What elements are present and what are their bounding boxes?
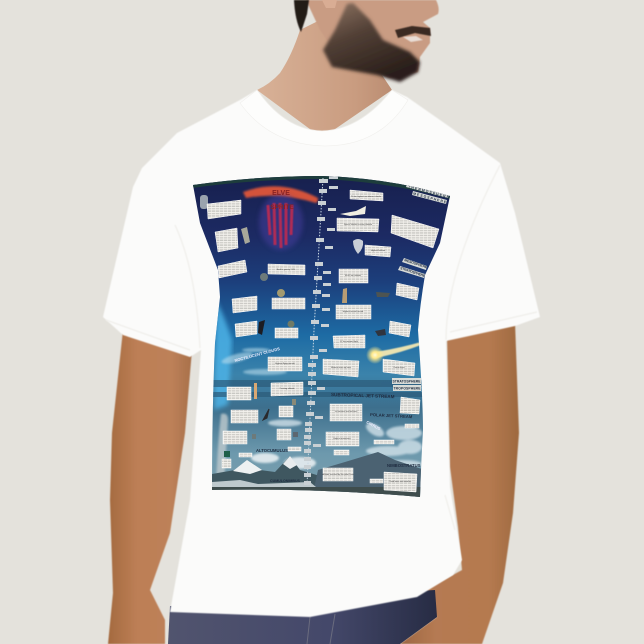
mountains: [212, 452, 422, 497]
right arm and hand: [400, 322, 519, 644]
box captions: [275, 195, 412, 483]
collar band: [240, 90, 408, 146]
box captions: Highest aircraft record: [343, 310, 364, 313]
mid clouds: [250, 452, 318, 470]
layer labels: POLAR JET STREAM: [370, 412, 413, 419]
box captions: Cloud base and weather: [389, 480, 412, 483]
elve and sprite labels: ELVE: [272, 190, 290, 197]
box captions: Meteors burn up here: [331, 366, 352, 369]
box captions: Highest balloon: [371, 249, 386, 252]
balloon: [353, 239, 363, 254]
box captions: Earth's gravity 1.6%: [277, 268, 295, 271]
box captions: Highest flying aircraft: [275, 362, 295, 365]
altitude ruler: [304, 176, 338, 486]
elve and sprite labels: [270, 190, 294, 209]
layer labels: [234, 185, 450, 483]
box captions: 27 km meteor flight: [340, 340, 358, 343]
noctilucent cloud wisps: [221, 348, 287, 375]
elve red arc: [243, 186, 318, 203]
beard: [323, 3, 431, 82]
layer labels: NOCTILUCENT CLOUDS: [234, 346, 281, 363]
layer labels: THERMOSPHERE: [408, 185, 450, 200]
box captions: Jet streams and airliners: [335, 410, 357, 413]
satellite and aircraft icons: [200, 195, 390, 457]
dark green top edge: [190, 174, 452, 199]
elve and sprite labels: SPRITE: [270, 204, 294, 211]
light blue aurora beam: [214, 300, 232, 410]
box captions: Ozone layer: [393, 366, 405, 369]
box captions: Altitude reached by the polar front: [322, 473, 354, 476]
left cloud column: [216, 414, 228, 484]
layer labels: SUBTROPICAL JET STREAM: [331, 392, 395, 399]
layer label plates: [392, 184, 449, 391]
layer labels: CUMULONIMBUS: [270, 479, 301, 483]
poster: atmosphere layers: [185, 170, 460, 500]
layer labels: CIRRUS: [366, 419, 382, 431]
ear: [322, 0, 337, 8]
layer labels: MESOSPHERE: [413, 192, 447, 204]
sleeve and side folds: [106, 165, 537, 530]
box captions: 48-40 km altitude: [345, 274, 362, 277]
left arm: [108, 330, 192, 644]
layer labels: STRATOSPHERE: [392, 380, 421, 384]
layer labels: NIMBOSTRATUS: [387, 463, 421, 468]
sky gradient: [185, 170, 460, 500]
face: [306, 0, 439, 78]
meteor: [366, 342, 421, 364]
tropopause bands: [210, 380, 425, 397]
info boxes: [207, 190, 439, 492]
layer labels: MESOSPHERE: [404, 258, 428, 270]
sprite: [259, 194, 303, 250]
neck: [257, 10, 420, 138]
hair: [294, 0, 309, 32]
jeans: [168, 590, 437, 644]
layer labels: STRATOSPHERE: [400, 266, 426, 278]
box captions: Highest mountains: [333, 437, 351, 440]
box captions: 90 km highest noctilucent clouds: [351, 195, 381, 198]
layer labels: TROPOSPHERE: [394, 386, 421, 390]
layer labels: ALTOCUMULUS: [256, 448, 288, 453]
box captions: Space Shuttle re-entry altitude: [344, 223, 373, 226]
space shuttle: [340, 206, 366, 216]
t-shirt: [103, 90, 540, 617]
box captions: Cruising altitude: [280, 387, 295, 390]
high clouds: [268, 420, 422, 468]
